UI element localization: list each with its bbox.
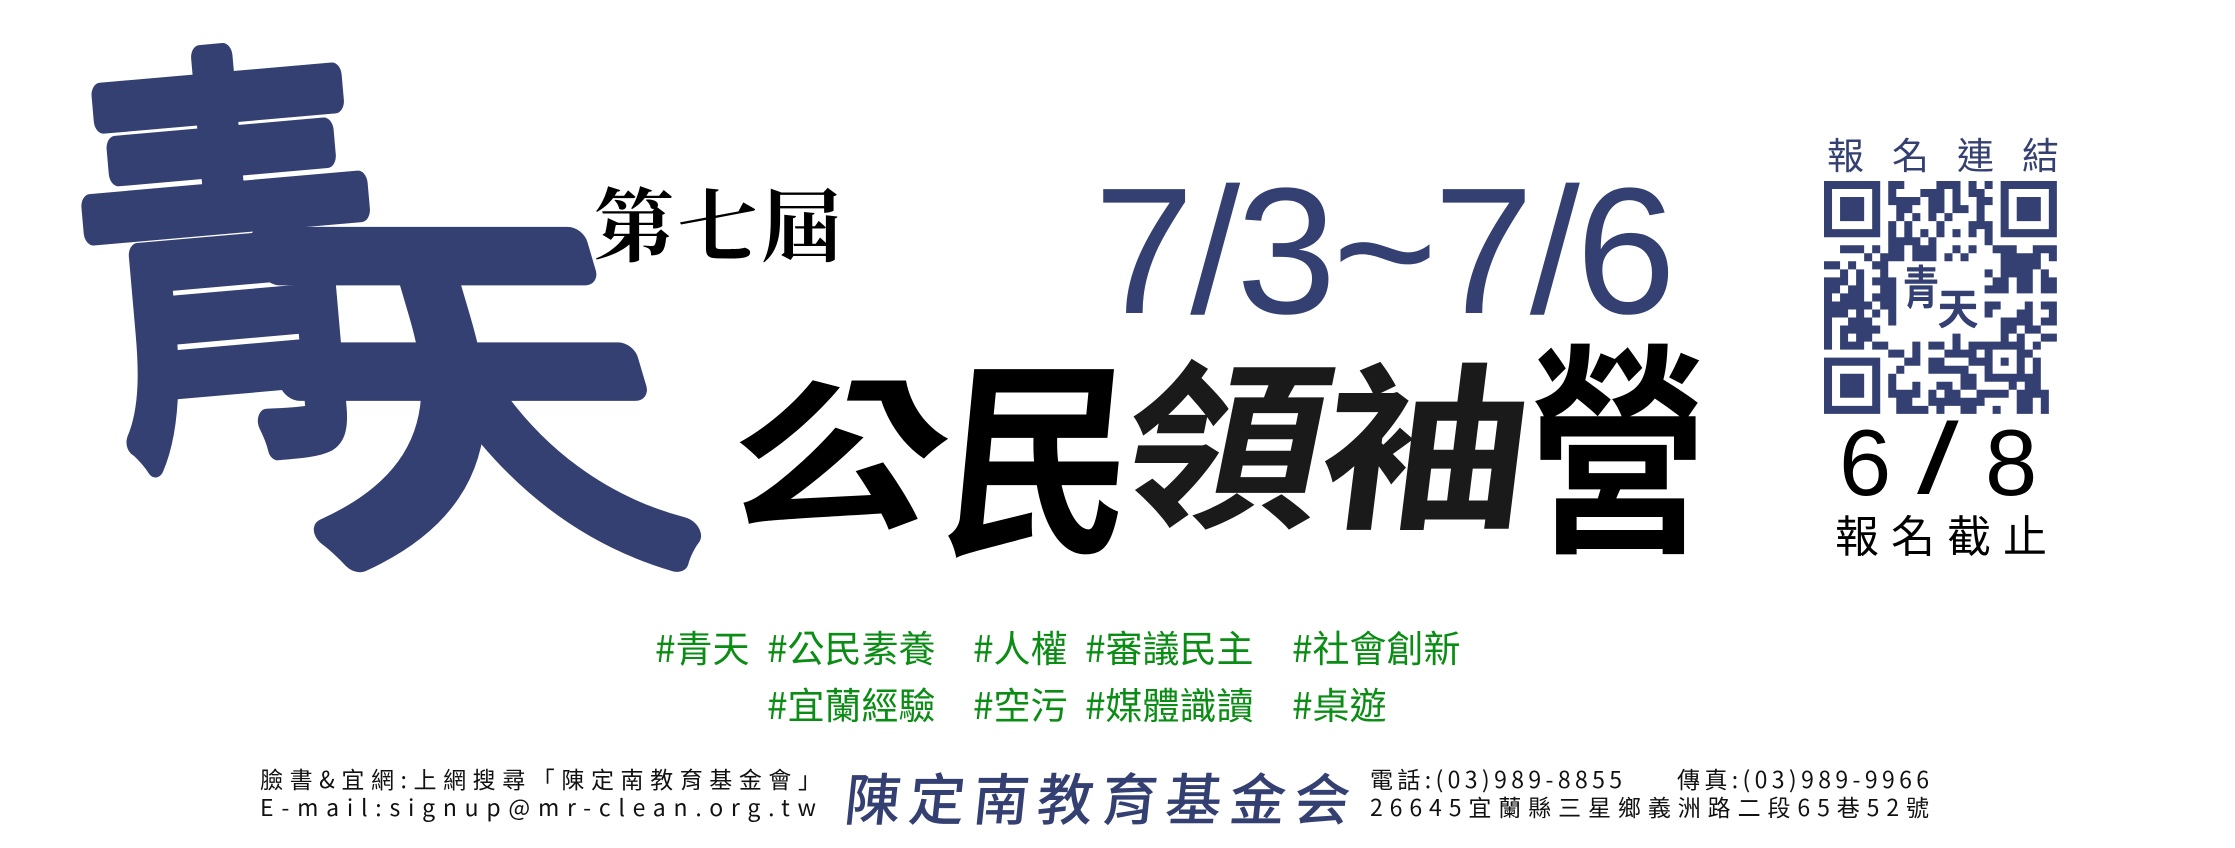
- title: 公民領袖營 calligraphy: 袖: [1309, 308, 1549, 566]
- QR code: [1824, 185, 2057, 410]
- logo: 青天 calligraphy: [49, 0, 729, 636]
- footer left: web and email: E-mail:signup@mr-clean.org.tw: [260, 789, 816, 823]
- title: 公民領袖營 calligraphy: 領: [1099, 305, 1357, 566]
- signup deadline date: 6: [1839, 410, 1891, 515]
- signup deadline date: [1839, 404, 2037, 515]
- hashtag row 2: [767, 676, 1387, 730]
- footer right: contact details: 26645宜蘭縣三星鄉義洲路二段65巷52號: [1370, 789, 1929, 823]
- footer centre: foundation name calligraphy: 陳定南教育基金会: [841, 756, 1355, 837]
- footer right: contact details: 傳真:(03)989-9966: [1677, 761, 1929, 795]
- hashtag row 1: #公民素養: [767, 619, 936, 673]
- hashtags: [655, 619, 1461, 730]
- hashtag row 2: #媒體識讀: [1085, 676, 1254, 730]
- footer left: web and email: 臉書&宜網:上網搜尋「陳定南教育基金會」: [260, 761, 821, 795]
- hashtag row 1: #審議民主: [1085, 619, 1254, 673]
- hashtag row 2: #桌遊: [1292, 676, 1387, 730]
- title: 公民領袖營 calligraphy: [707, 274, 1708, 599]
- footer right: contact details: [1370, 761, 1929, 823]
- signup deadline date: /: [1917, 404, 1959, 515]
- hashtag row 1: #社會創新: [1292, 619, 1461, 673]
- QR centre mark: 青天: 青: [1903, 251, 1939, 317]
- title: 公民領袖營 calligraphy: 民: [931, 295, 1151, 599]
- QR centre mark: 青天: 天: [1938, 275, 1978, 336]
- signup link heading: 報名連結: [1827, 126, 2059, 180]
- logo: 青天 calligraphy: 天: [184, 93, 729, 636]
- hashtag row 1: #青天: [655, 619, 750, 673]
- title: 公民領袖營 calligraphy: 公: [707, 327, 977, 562]
- edition label: 第七屆: 第七屆: [594, 163, 841, 278]
- QR centre mark: 青天: [1903, 251, 1978, 336]
- hashtag row 2: #空污: [973, 676, 1068, 730]
- hashtag row 1: #人權: [973, 619, 1068, 673]
- QR signup panel: [1824, 126, 2059, 565]
- deadline label: 報名截止: [1835, 501, 2047, 565]
- footer right: contact details: 電話:(03)989-8855: [1370, 761, 1622, 795]
- footer left: web and email: [260, 761, 821, 823]
- title: 公民領袖營 calligraphy: 營: [1528, 274, 1708, 599]
- hashtag row 2: #宜蘭經驗: [767, 676, 936, 730]
- signup deadline date: 8: [1985, 410, 2037, 515]
- event dates: 7/3~7/6: [1094, 151, 1676, 352]
- hashtag row 1: [655, 619, 1461, 673]
